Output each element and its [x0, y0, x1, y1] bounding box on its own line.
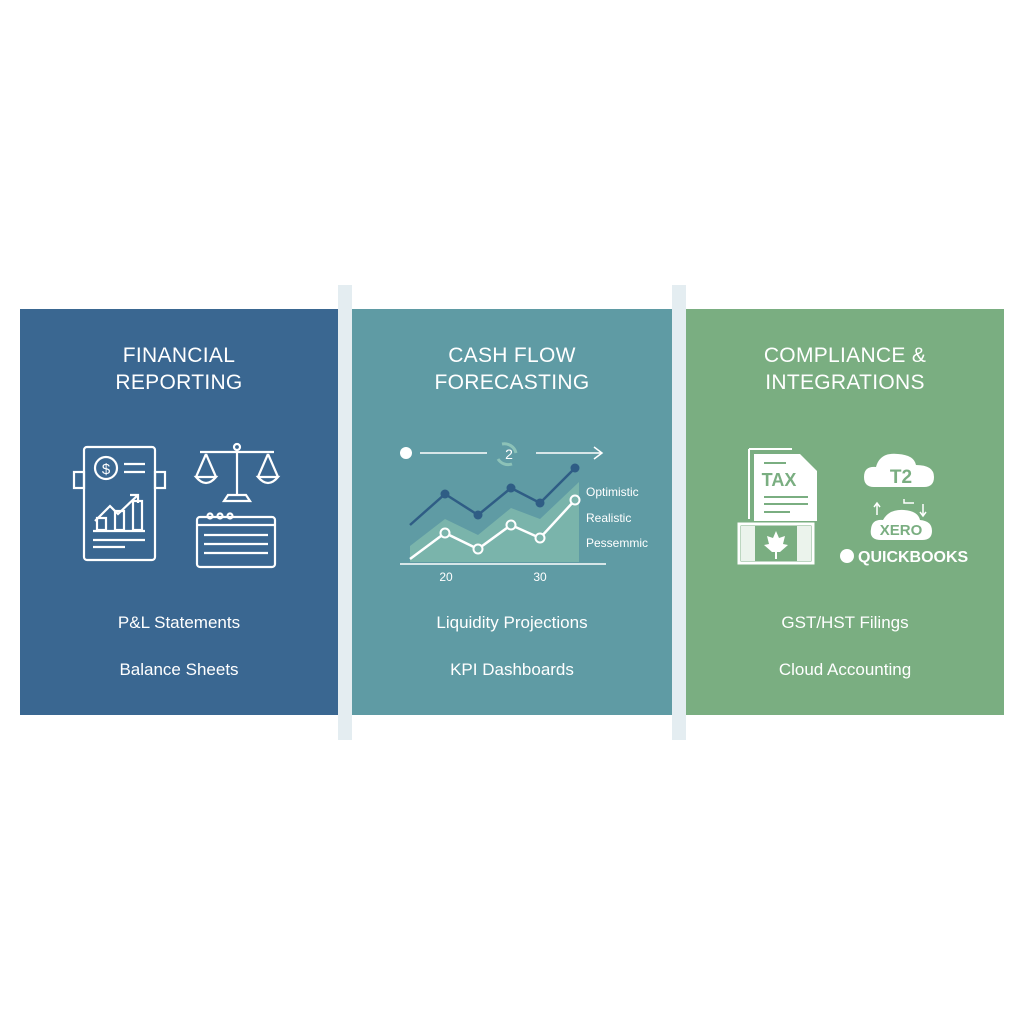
icon: tax, clouds, quickbooks: TAX — [762, 470, 796, 490]
heading: cash flow forecasting: CASH FLOW — [448, 344, 576, 367]
heading: cash flow forecasting — [434, 344, 589, 394]
chart: forecast scenarios — [400, 442, 648, 584]
icon: report and scale: $ — [102, 461, 111, 478]
heading: financial reporting: FINANCIAL — [123, 344, 235, 367]
panel: cash flow forecasting — [352, 309, 672, 715]
chart: forecast scenarios: Optimistic — [586, 485, 639, 499]
heading: compliance & integrations: INTEGRATIONS — [765, 371, 925, 394]
chart: forecast scenarios: 20 — [439, 570, 453, 584]
heading: financial reporting: REPORTING — [115, 371, 243, 394]
text: P&L statements: P&L Statements — [118, 613, 240, 632]
icon: report and scale — [72, 442, 280, 568]
panel: compliance & integrations — [686, 309, 1004, 715]
heading: cash flow forecasting: FORECASTING — [434, 371, 589, 394]
panel: financial reporting — [20, 309, 338, 715]
chart: forecast scenarios: Realistic — [586, 511, 631, 525]
text: KPI dashboards: KPI Dashboards — [450, 660, 574, 679]
icon: tax, clouds, quickbooks: XERO — [880, 522, 923, 539]
chart: forecast scenarios: Pessemmic — [586, 536, 648, 550]
icon: tax, clouds, quickbooks — [738, 448, 969, 566]
text: liquidity projections: Liquidity Projections — [436, 613, 588, 632]
heading: financial reporting — [115, 344, 243, 394]
text: cloud accounting: Cloud Accounting — [779, 660, 911, 679]
icon: tax, clouds, quickbooks: T2 — [890, 467, 912, 488]
text: balance sheets: Balance Sheets — [119, 660, 239, 679]
chart: forecast scenarios: 2 — [505, 446, 513, 462]
chart: forecast scenarios: 30 — [533, 570, 547, 584]
text: GST/HST filings: GST/HST Filings — [781, 613, 909, 632]
heading: compliance & integrations: COMPLIANCE & — [764, 344, 926, 367]
heading: compliance & integrations — [764, 344, 926, 394]
icon: tax, clouds, quickbooks: QUICKBOOKS — [858, 549, 969, 566]
